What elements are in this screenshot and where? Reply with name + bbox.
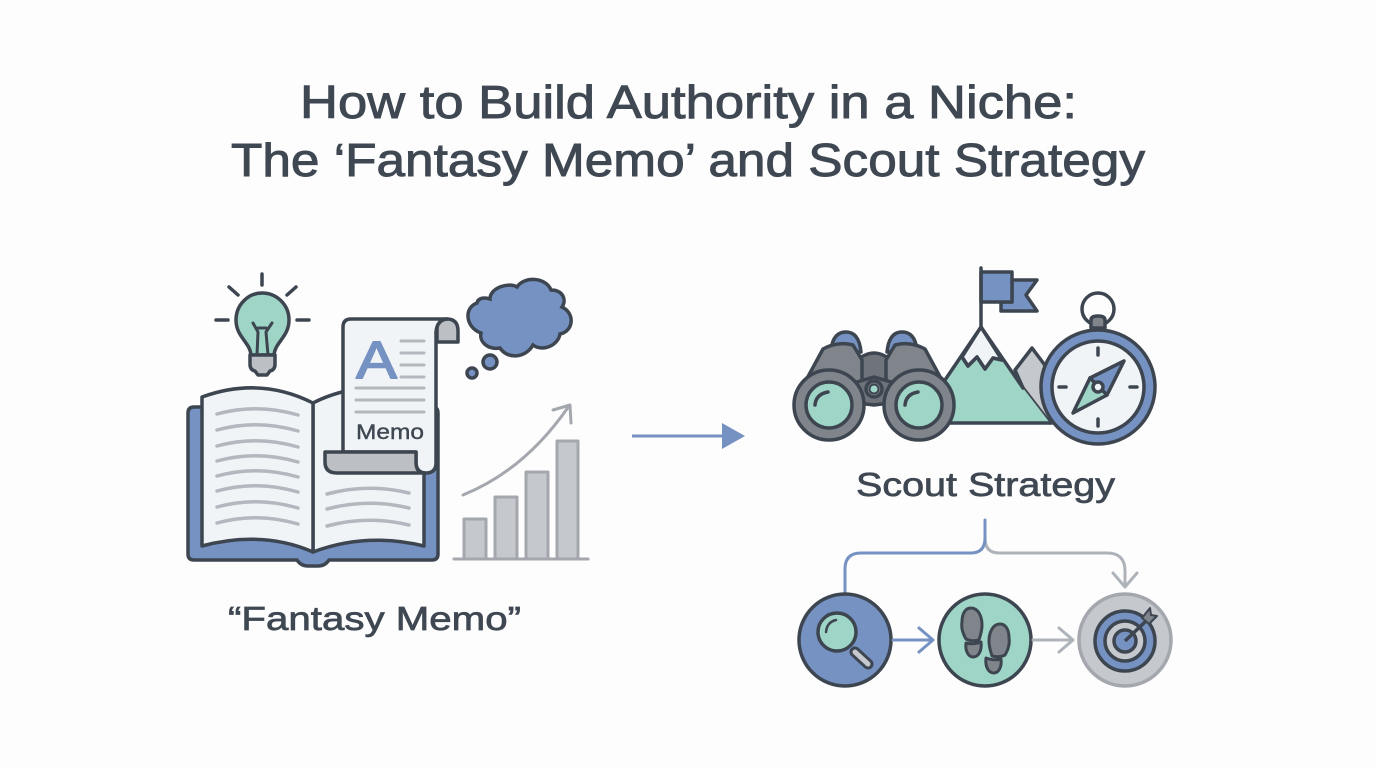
arrow: footsteps to target: [1033, 628, 1073, 652]
arrow: memo to scout: [632, 423, 745, 449]
icon: light bulb: [216, 274, 309, 375]
bridge: [860, 353, 888, 400]
arrow: search to footsteps: [893, 628, 933, 652]
book cover: [188, 407, 438, 566]
icon: memo scroll: [325, 319, 458, 473]
label: Fantasy Memo: “Fantasy Memo”: [228, 600, 521, 637]
icon: thought cloud: [467, 279, 571, 378]
title: How to Build Authority in a Niche:: [300, 76, 1077, 128]
step: target: [1079, 594, 1171, 686]
icon: open book: [188, 388, 438, 566]
front flag: [981, 272, 1012, 302]
scroll top curl: [437, 319, 458, 342]
right page: [313, 390, 424, 552]
label: Scout Strategy: Scout Strategy: [856, 466, 1116, 503]
compass needle: [1090, 361, 1124, 395]
right lens: [884, 370, 954, 440]
hinge: [850, 377, 898, 405]
icon: compass: [1041, 293, 1155, 444]
rear mountain: [1015, 348, 1050, 423]
title: [231, 76, 1145, 186]
paper: [343, 319, 447, 473]
left lens: [794, 370, 864, 440]
title: The ‘Fantasy Memo’ and Scout Strategy: [231, 134, 1145, 186]
step: search: [799, 594, 891, 686]
right page text lines: [327, 488, 409, 526]
main mountain: [945, 327, 1050, 423]
icon: flag and mountains: [945, 268, 1052, 423]
memo letter A: A: [356, 331, 398, 390]
scroll bottom: [325, 452, 425, 473]
memo label: Memo: [356, 421, 424, 444]
bracket connector: [845, 520, 1137, 593]
bar chart with growth arrow: [454, 405, 588, 559]
left page: [202, 388, 313, 552]
step: footsteps: [939, 594, 1031, 686]
icon: binoculars: [794, 332, 954, 440]
left page text lines: [217, 409, 298, 524]
memo lines: [356, 341, 424, 412]
rear flag: [1001, 280, 1037, 311]
barrels: [798, 344, 862, 395]
eyecups: [831, 332, 861, 352]
